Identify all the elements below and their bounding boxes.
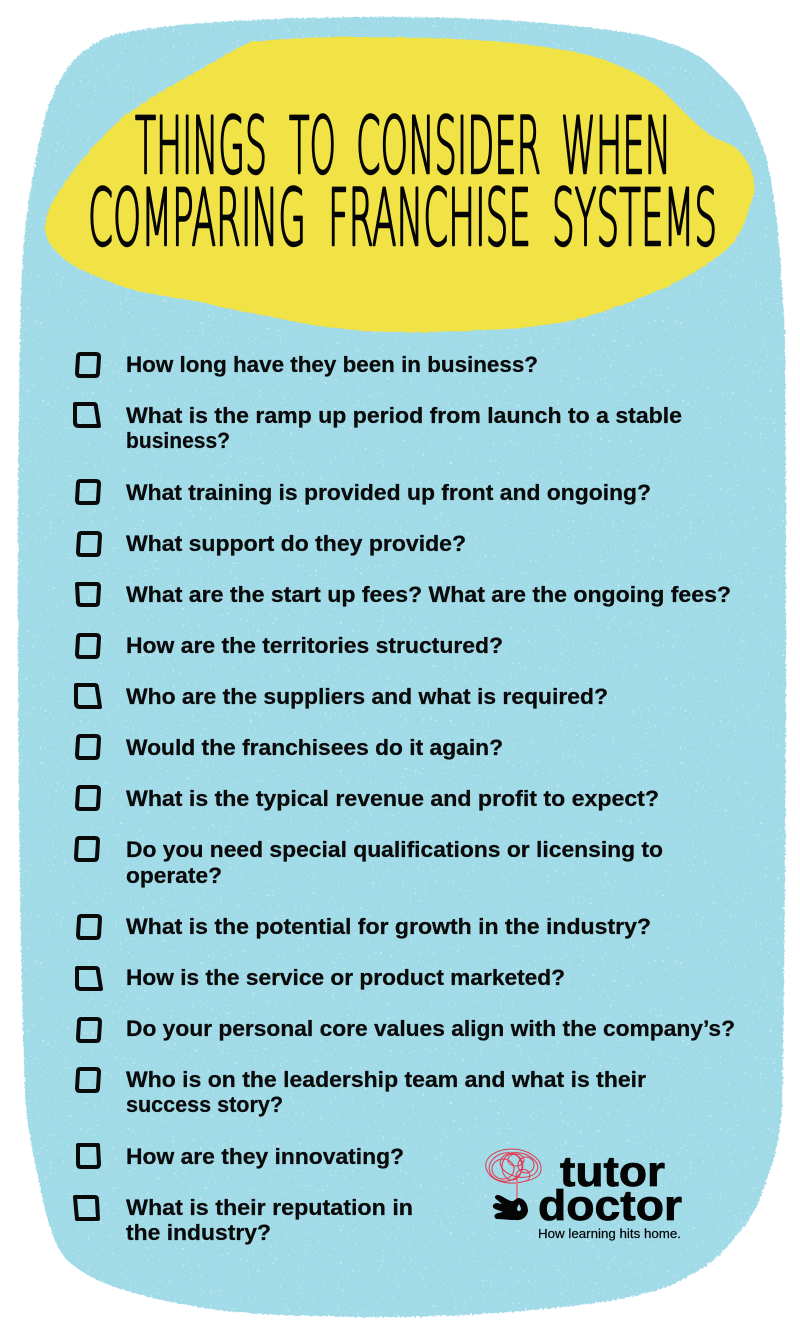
- logo: tutor doctor: doctor: [538, 1182, 682, 1230]
- item 3: What training is provided up front and ongoing?: [126, 480, 651, 505]
- item 14: success story?: [126, 1092, 283, 1117]
- item 4: What support do they provide?: [126, 531, 466, 556]
- logo: tutor doctor: [486, 1148, 682, 1241]
- item 2: business?: [126, 428, 230, 453]
- title: COMPARING: [88, 174, 306, 264]
- title: CONSIDER: [356, 102, 541, 192]
- item 15: How are they innovating?: [126, 1144, 404, 1169]
- item 12: How is the service or product marketed?: [126, 965, 565, 990]
- item 10: operate?: [126, 863, 222, 888]
- item 14: Who is on the leadership team and what is their: [126, 1067, 646, 1092]
- item 7: Who are the suppliers and what is required?: [126, 684, 608, 709]
- item 13: Do your personal core values align with the company’s?: [126, 1016, 735, 1041]
- icon: stem: [516, 1180, 518, 1200]
- title: [88, 102, 717, 264]
- item 9: What is the typical revenue and profit to expect?: [126, 786, 659, 811]
- title: FRANCHISE: [328, 174, 531, 264]
- item 5: What are the start up fees? What are the ongoing fees?: [126, 582, 731, 607]
- item 16: the industry?: [126, 1220, 271, 1245]
- title: WHEN: [561, 102, 671, 192]
- item 11: What is the potential for growth in the industry?: [126, 914, 651, 939]
- item 10: [76, 837, 663, 888]
- title: THINGS: [135, 102, 267, 192]
- item 8: Would the franchisees do it again?: [126, 735, 503, 760]
- item 16: [75, 1195, 413, 1245]
- item 10: Do you need special qualifications or licensing to: [126, 837, 663, 862]
- icon: brain scribble: [486, 1149, 541, 1185]
- icon: hand: [493, 1195, 528, 1220]
- item 14: [77, 1067, 646, 1117]
- item 6: How are the territories structured?: [126, 633, 503, 658]
- item 16: What is their reputation in: [126, 1195, 413, 1220]
- wordmark: tutor: [560, 1148, 665, 1196]
- panel: yellow title blob: [45, 37, 754, 332]
- tagline: How learning hits home.: [538, 1226, 681, 1241]
- title: TO: [289, 102, 336, 192]
- item 1: How long have they been in business?: [126, 352, 538, 377]
- item 2: What is the ramp up period from launch to a stable: [126, 403, 682, 428]
- item 2: [75, 403, 682, 453]
- checklist: [75, 352, 735, 1245]
